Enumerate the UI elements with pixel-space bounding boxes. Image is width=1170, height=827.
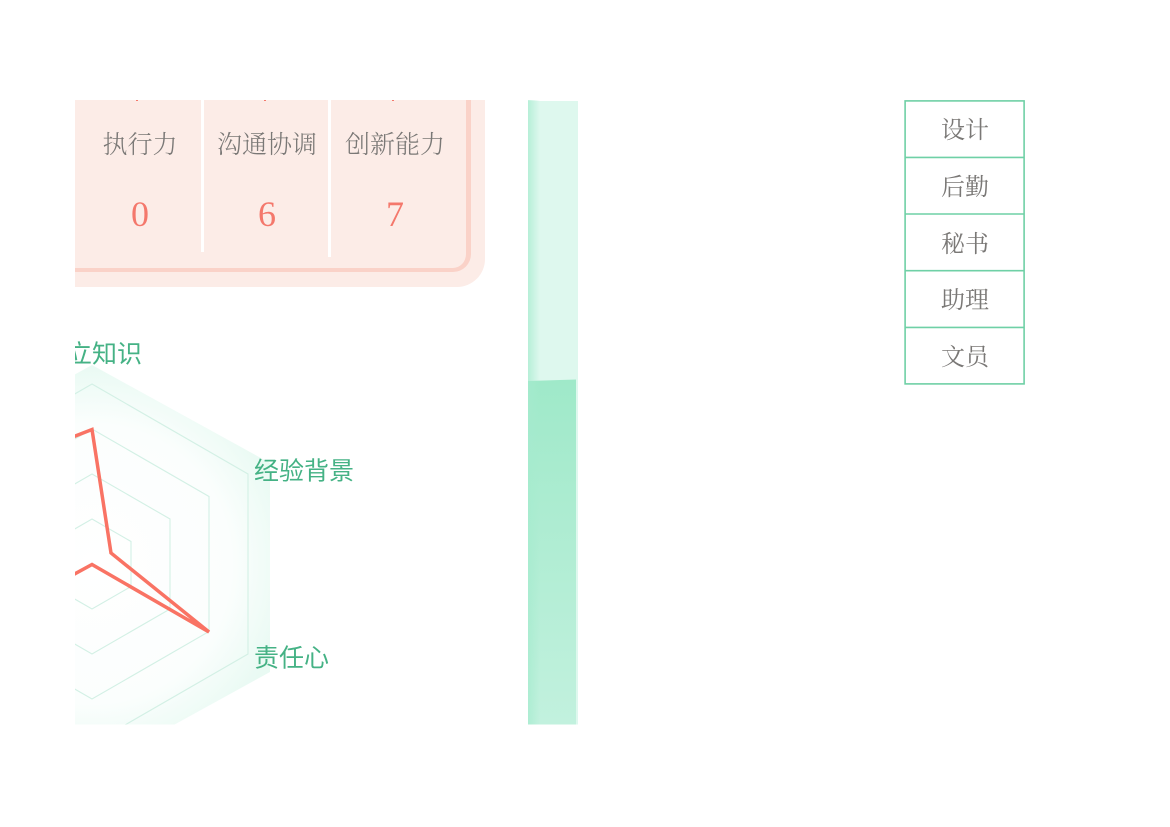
radar data line [60,430,209,632]
bar left edge shading [528,100,540,724]
axis label: experience: 经验背景 [254,458,354,486]
row: clerk: 文员 [941,345,989,371]
score: execution: 0 [131,194,149,234]
axis label: knowledge: 立知识 [67,340,142,368]
radar background [75,365,270,724]
divider one [201,100,204,252]
axis label: responsibility: 责任心 [254,644,329,672]
row: secretary: 秘书 [941,232,989,258]
red tick one [136,100,138,101]
table: job types [904,100,1025,385]
row: logistics: 后勤 [941,175,989,201]
label: communication: 沟通协调 [217,132,317,159]
row: design: 设计 [941,118,989,144]
table grid lines [904,100,1025,385]
radar grid [75,384,248,724]
score: innovation: 7 [386,194,404,234]
red tick three [392,100,394,101]
radar chart [75,341,353,724]
vertical progress bar [528,100,578,724]
bar track [528,101,578,724]
row: assistant: 助理 [941,288,989,314]
panel: skill scores [75,100,485,287]
inner panel border [65,80,471,272]
label: innovation: 创新能力 [345,132,445,159]
bar fill [528,380,576,724]
red tick two [264,100,266,101]
divider two [328,100,331,257]
score: communication: 6 [258,194,276,234]
label: execution: 执行力 [102,132,178,159]
